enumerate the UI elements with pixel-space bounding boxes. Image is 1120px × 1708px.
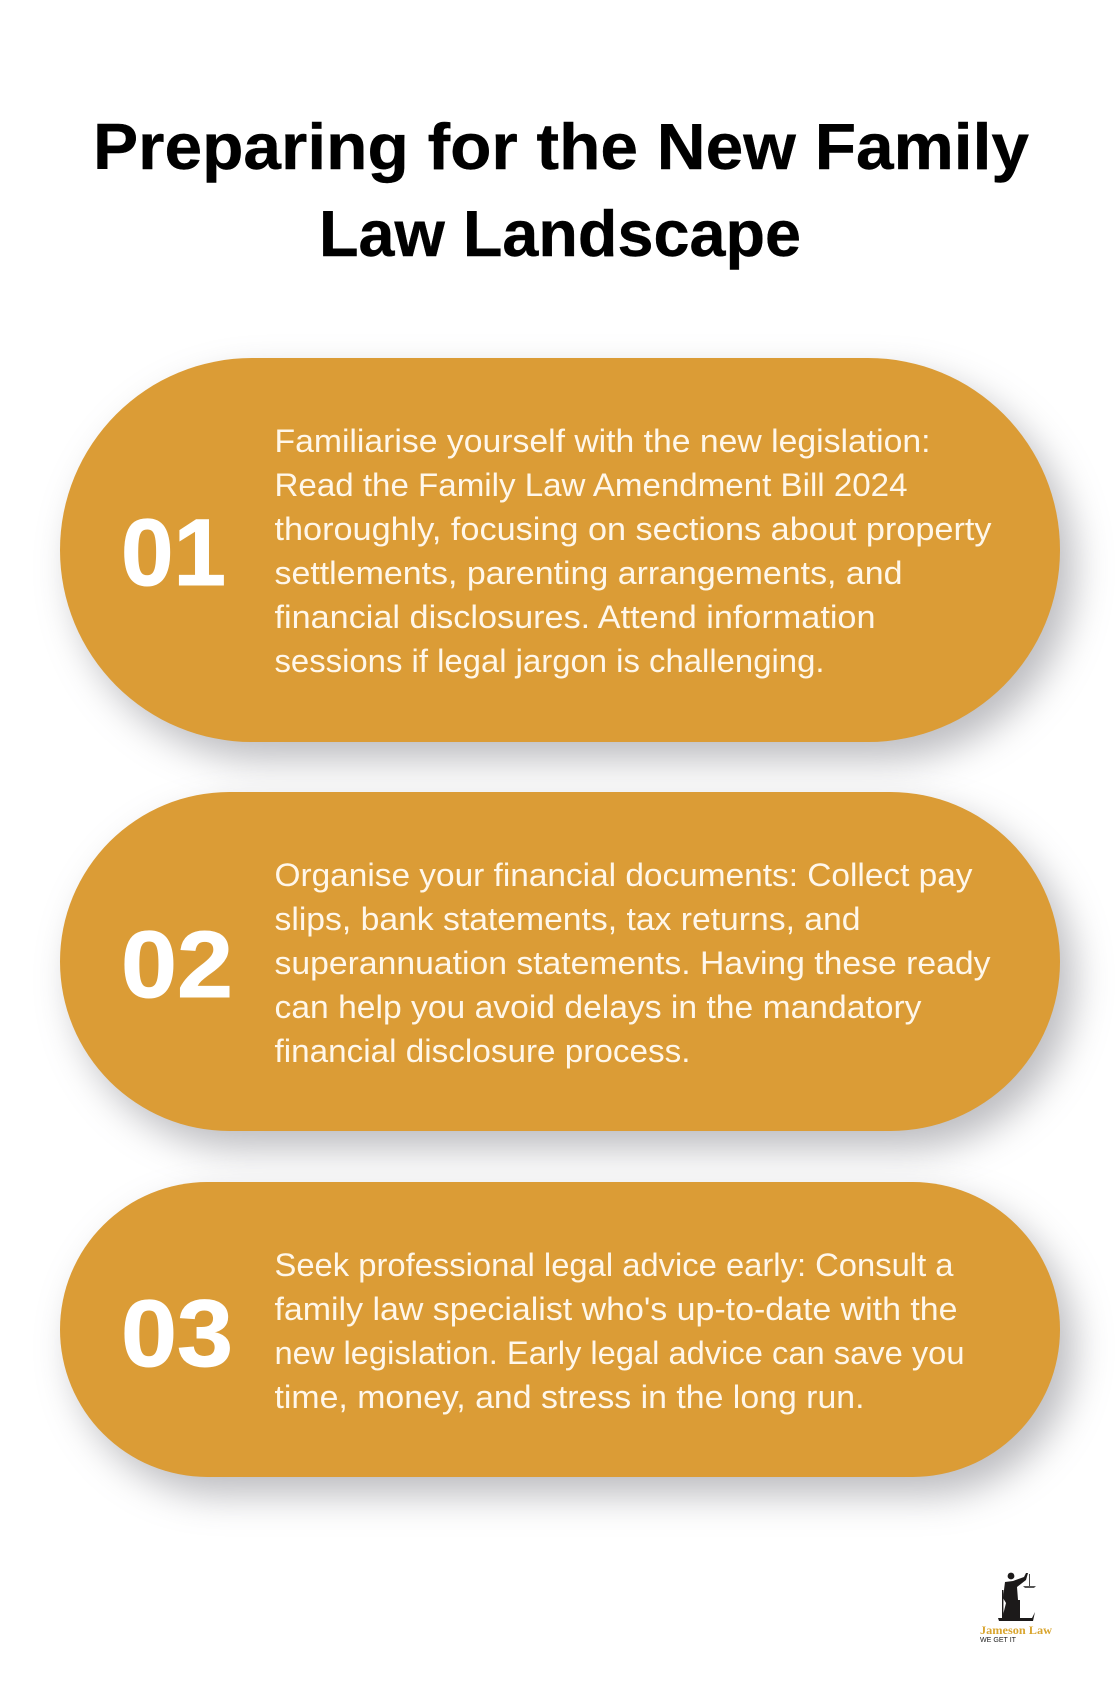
panel: step 01 <box>60 358 1060 742</box>
text block 02: superannuation statements. Having these ready <box>274 945 991 981</box>
text block 01: Read the Family Law Amendment Bill 2024 <box>274 467 908 503</box>
text block 03: family law specialist who's up-to-date with the <box>274 1291 958 1327</box>
title <box>93 110 1029 270</box>
text block 03: Seek professional legal advice early: Consult a <box>274 1247 954 1283</box>
text block 02: Organise your financial documents: Collect pay <box>274 857 973 893</box>
logo wordmark: Jameson Law <box>980 1625 1053 1637</box>
text block 01: thoroughly, focusing on sections about property <box>274 511 992 547</box>
text block 02: financial disclosure process. <box>274 1033 690 1069</box>
number 03: 03 <box>121 1281 233 1387</box>
title: Law Landscape <box>319 197 801 270</box>
text block 01: sessions if legal jargon is challenging. <box>274 643 824 679</box>
text block 03: new legislation. Early legal advice can save you <box>274 1335 964 1371</box>
logo tagline: WE GET IT <box>980 1635 1016 1644</box>
pill background 02 <box>60 792 1060 1131</box>
title: Preparing for the New Family <box>93 110 1029 183</box>
number 01: 01 <box>121 500 226 606</box>
text block 01: Familiarise yourself with the new legislation: <box>274 423 930 459</box>
text block 02: can help you avoid delays in the mandatory <box>274 989 922 1025</box>
text block 01 <box>274 423 992 679</box>
panel: step 03 <box>60 1182 1060 1477</box>
text block 02 <box>274 857 991 1069</box>
text block 03 <box>274 1247 964 1415</box>
text block 01: financial disclosures. Attend information <box>274 599 876 635</box>
text block 02: slips, bank statements, tax returns, and <box>274 901 860 937</box>
logo: Jameson Law <box>980 1573 1053 1644</box>
number 02: 02 <box>121 912 233 1018</box>
pill background 01 <box>60 358 1060 742</box>
text block 03: time, money, and stress in the long run. <box>274 1379 865 1415</box>
text block 01: settlements, parenting arrangements, and <box>274 555 902 591</box>
icon: lady justice <box>998 1573 1036 1621</box>
panel: step 02 <box>60 792 1060 1131</box>
pill background 03 <box>60 1182 1060 1477</box>
